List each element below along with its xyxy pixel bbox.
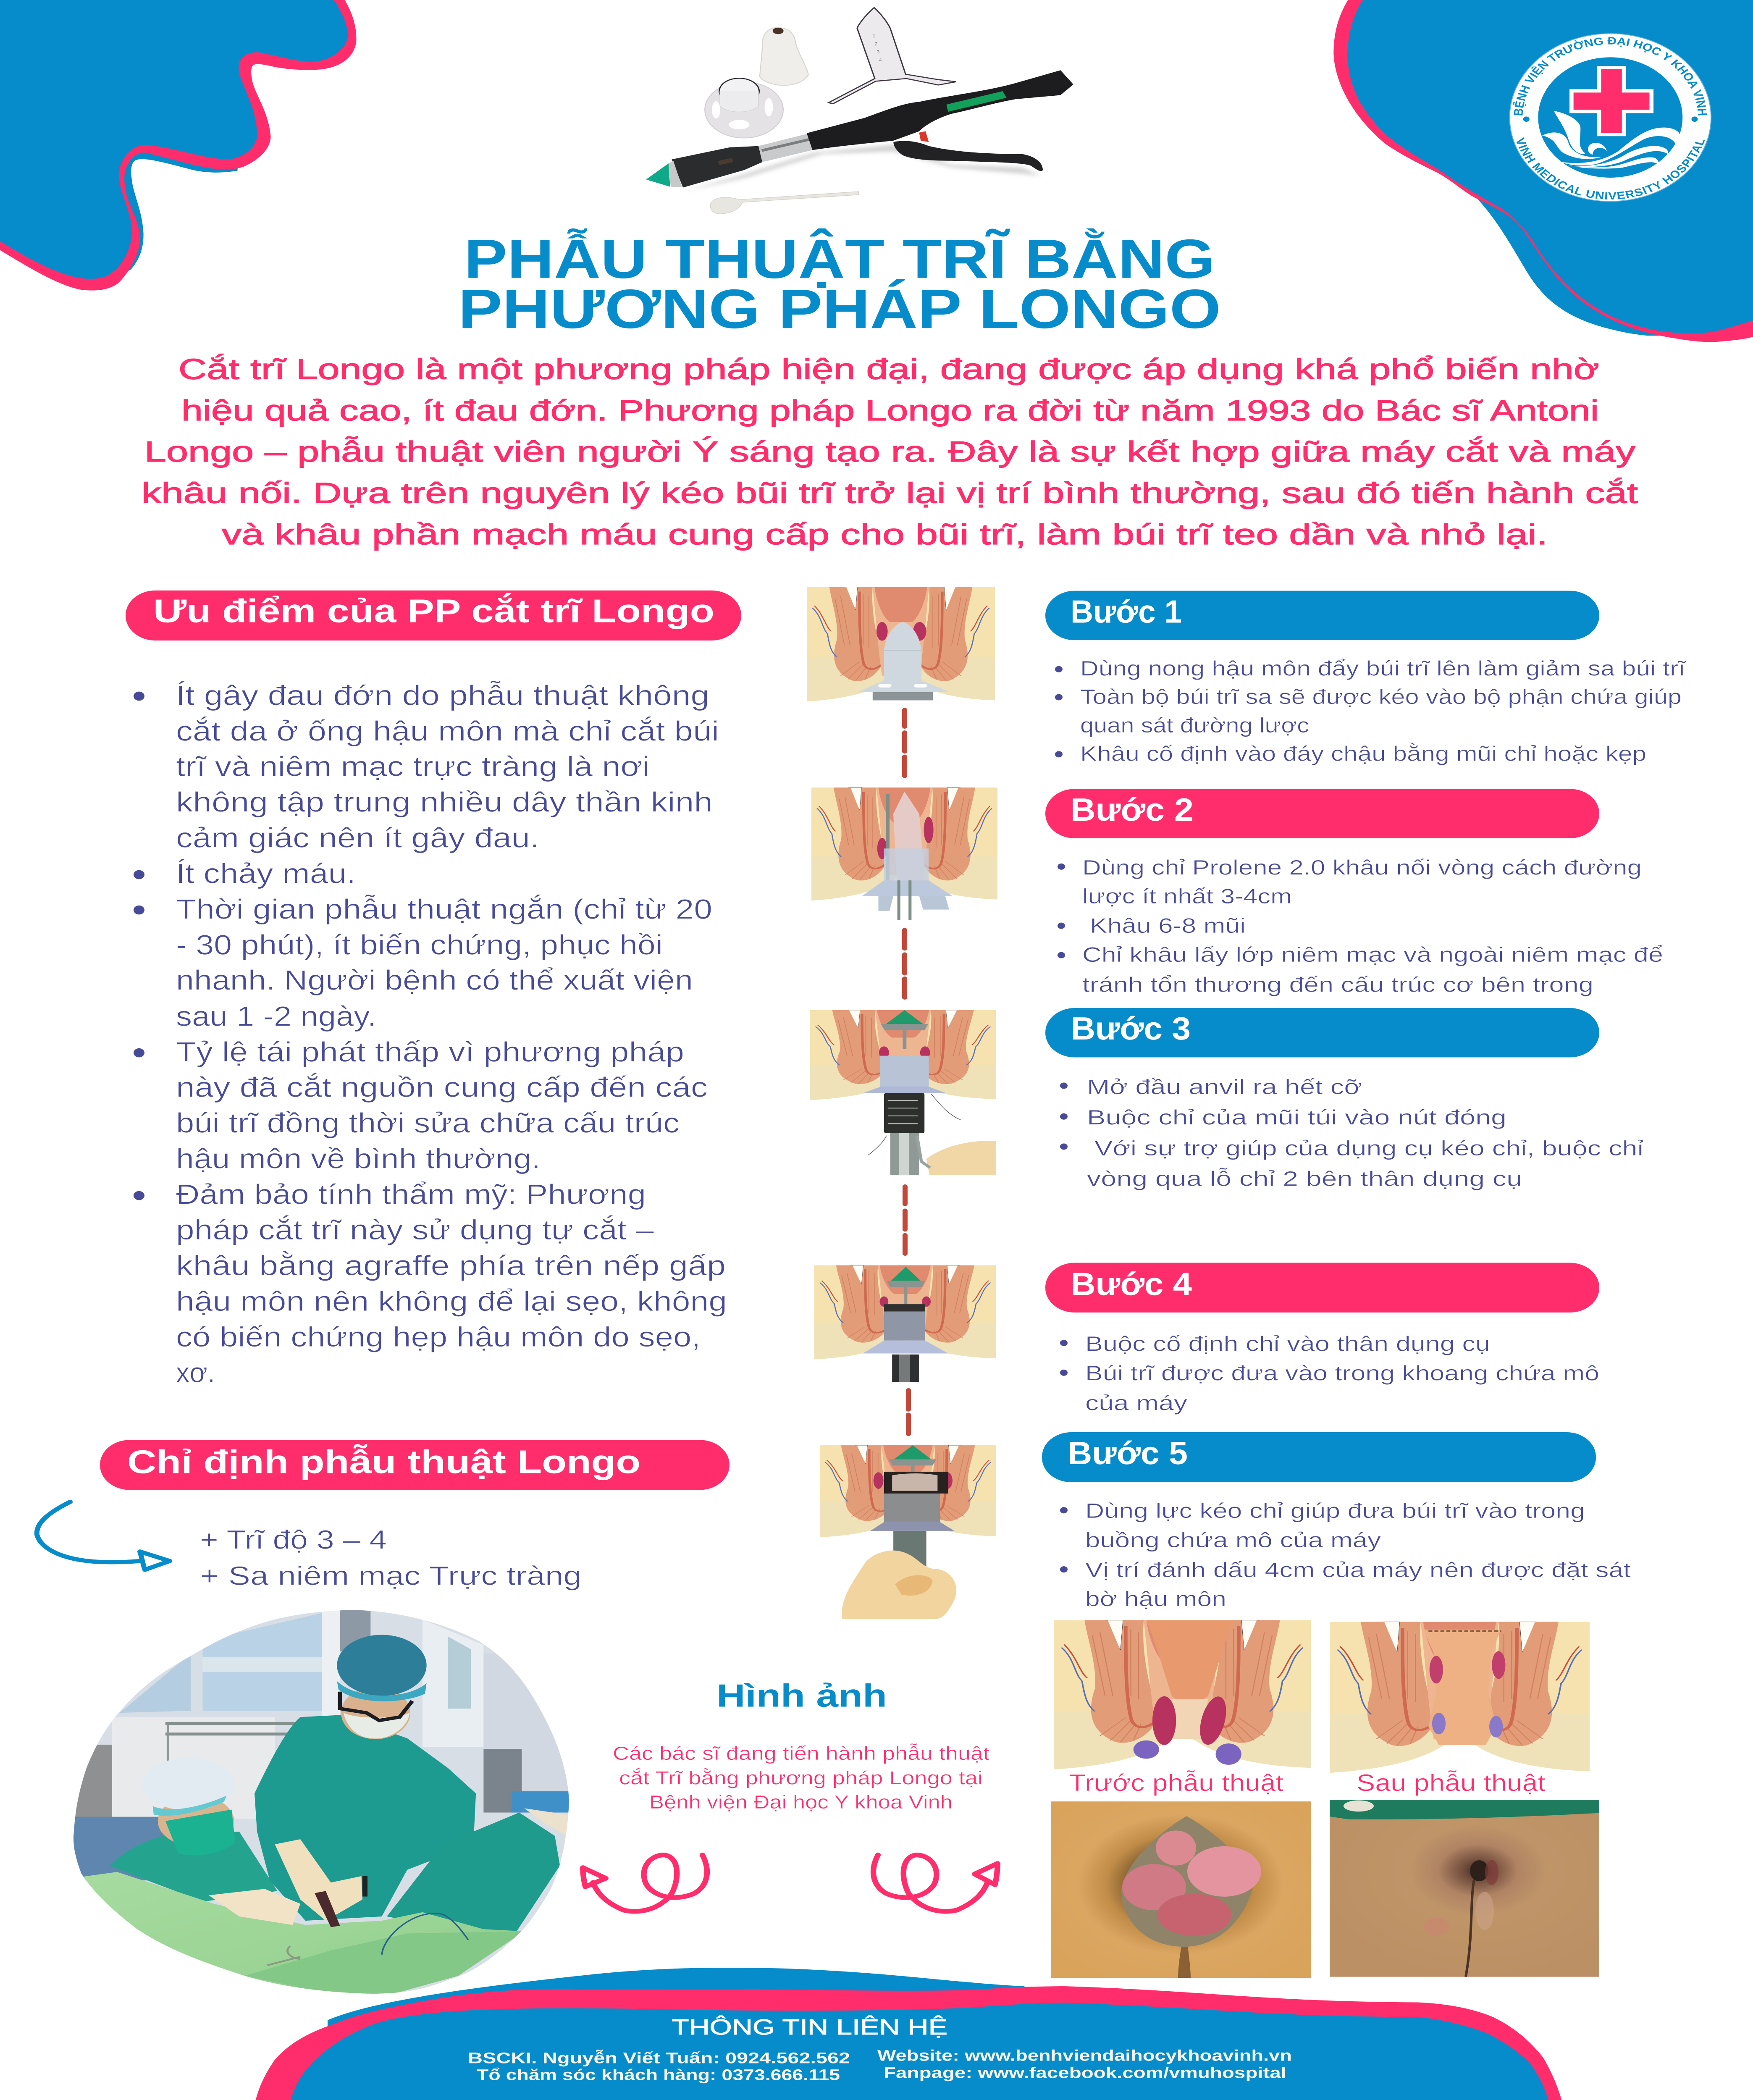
step 4 illustration [814, 1265, 996, 1382]
intro paragraph [142, 353, 1638, 551]
footer panel [256, 1968, 1561, 2100]
intro paragraph: Longo – phẫu thuật viên người Ý sáng tạo ra. Đây là sự kết hợp giữa máy cắt và máy [144, 436, 1636, 468]
footer contacts: Tổ chăm sóc khách hàng: 0373.666.115 [477, 2066, 840, 2084]
panel: advantages list: hậu môn nên không để lại sẹo, không [176, 1286, 727, 1317]
panel: step 1: Toàn bộ búi trĩ sa sẽ được kéo vào bộ phận chứa giúp [1080, 685, 1682, 709]
panel: step 3: Bước 3 [1071, 1011, 1191, 1047]
panel: step 5 [1042, 1432, 1631, 1611]
panel: advantages list: Tỷ lệ tái phát thấp vì phương pháp [176, 1037, 684, 1068]
panel: step 2: tránh tổn thương đến cấu trúc cơ bên trong [1082, 973, 1593, 996]
intro paragraph: hiệu quả cao, ít đau đớn. Phương pháp Longo ra đời từ năm 1993 do Bác sĩ Antoni [181, 394, 1599, 427]
icon: circular stapler [646, 70, 1073, 187]
panel: step 5: Vị trí đánh dấu 4cm của máy nên được đặt sát [1085, 1558, 1631, 1582]
footer contacts: Website: www.benhviendaihocykhoavinh.vn [877, 2047, 1292, 2064]
panel: step 3: Với sự trợ giúp của dụng cụ kéo chỉ, buộc chỉ [1094, 1137, 1643, 1160]
hospital logo [1510, 34, 1711, 202]
assistant surgeon [110, 1758, 278, 1902]
arrow: blue curved arrow [37, 1502, 170, 1570]
decorative corner blob: top left [0, 0, 356, 291]
icon: anoscope ruler [829, 8, 956, 104]
icon: anoscope ruler: 4 [879, 58, 882, 63]
panel: step 4: của máy [1085, 1391, 1187, 1415]
panel: step 2: lược ít nhất 3-4cm [1082, 885, 1292, 908]
text: indications list: + Sa niêm mạc Trực tràng [200, 1561, 582, 1591]
panel: advantages list: Ít chảy máu. [176, 858, 356, 889]
footer heading: THÔNG TIN LIÊN HỆ [672, 2015, 947, 2040]
decorative dashes [903, 1186, 908, 1254]
panel: step 4 [1045, 1263, 1599, 1415]
panel: advantages heading pill: Ưu điểm của PP cắt trĩ Longo [153, 593, 714, 629]
panel: advantages list: sau 1 -2 ngày. [176, 1000, 376, 1032]
step 1 illustration [807, 587, 995, 704]
panel: step 5: Dùng lực kéo chỉ giúp đưa búi trĩ vào trong [1085, 1499, 1585, 1522]
panel: advantages list: Ít gây đau đớn do phẫu thuật không [176, 680, 709, 711]
arrow: pink squiggle right [874, 1855, 997, 1911]
panel: step 1: Bước 1 [1071, 594, 1182, 630]
steps illustration column [807, 587, 997, 1619]
panel: advantages list: hậu môn về bình thường. [176, 1143, 541, 1174]
footer contacts: BSCKI. Nguyễn Viết Tuấn: 0924.562.562 [468, 2050, 850, 2067]
photo: surgeons operating [66, 1607, 575, 2001]
photo: after surgery [1330, 1800, 1599, 1977]
before-surgery diagram [1054, 1620, 1311, 1772]
decorative corner blob with logo: top right [1333, 0, 1753, 342]
panel: advantages list: Đảm bảo tính thẩm mỹ: Phương [176, 1179, 646, 1210]
panel: step 1: Khâu cố định vào đáy chậu bằng mũi chỉ hoặc kẹp [1080, 742, 1646, 765]
panel: advantages list: không tập trung nhiều dây thần kinh [176, 786, 713, 818]
panel: step 2: Khâu 6-8 mũi [1090, 914, 1246, 937]
step 3 illustration [810, 1010, 996, 1175]
panel: advantages list: Thời gian phẫu thuật ngắn (chỉ từ 20 [176, 894, 712, 925]
panel: indications heading pill: Chỉ định phẫu thuật Longo [127, 1444, 640, 1480]
title: PHƯƠNG PHÁP LONGO [458, 278, 1221, 340]
icon: clear anal dilator disc [705, 78, 783, 138]
panel: step 1: Dùng nong hậu môn đẩy búi trĩ lên làm giảm sa búi trĩ [1080, 656, 1686, 680]
panel: step 2: Bước 2 [1071, 792, 1194, 828]
panel: step 3: Mở đầu anvil ra hết cỡ [1087, 1075, 1362, 1099]
icon: anoscope ruler: 1 [873, 34, 875, 38]
patient drape [387, 1813, 560, 1935]
caption: before surgery: Trước phẫu thuật [1069, 1769, 1283, 1796]
panel: step 2: Chỉ khâu lấy lớp niêm mạc và ngoài niêm mạc để [1082, 943, 1663, 966]
gloved hands [209, 1839, 367, 1927]
hospital logo: VINH MEDICAL UNIVERSITY HOSPITAL [1513, 136, 1708, 202]
panel: step 1: quan sát đường lược [1080, 714, 1309, 737]
decorative dashes [906, 1390, 911, 1434]
text: indications list [200, 1525, 582, 1591]
heading: images: Hình ảnh [716, 1678, 887, 1714]
text: photo caption [613, 1743, 989, 1813]
stapler kit image [646, 8, 1073, 214]
text: photo caption: cắt Trĩ bằng phương pháp Longo tại [619, 1767, 983, 1788]
footer contacts [468, 2047, 1292, 2084]
icon: anoscope ruler: 2 [875, 42, 878, 47]
panel: step 5: bờ hậu môn [1085, 1587, 1226, 1611]
photo: before surgery [1051, 1801, 1311, 1978]
panel: step 2 [1045, 789, 1663, 996]
intro paragraph: khâu nối. Dựa trên nguyên lý kéo bũi trĩ trở lại vị trí bình thường, sau đó tiến hành cắt [142, 477, 1638, 509]
panel: advantages list: búi trĩ đồng thời sửa chữa cấu trúc [176, 1108, 680, 1139]
panel: step 4: Búi trĩ được đưa vào trong khoang chứa mô [1085, 1362, 1599, 1385]
icon: spoon tool [710, 192, 859, 214]
step 5 illustration [820, 1445, 996, 1619]
intro paragraph: Cắt trĩ Longo là một phương pháp hiện đại, đang được áp dụng khá phổ biến nhờ [178, 353, 1599, 386]
panel: step 3: vòng qua lỗ chỉ 2 bên thân dụng cụ [1087, 1167, 1522, 1190]
panel: advantages list: khâu bằng agraffe phía trên nếp gấp [176, 1250, 726, 1281]
panel: advantages list: - 30 phút), ít biến chứng, phục hồi [176, 929, 663, 961]
panel: step 2: Dùng chỉ Prolene 2.0 khâu nối vòng cách đường [1082, 856, 1642, 879]
text: indications list: + Trĩ độ 3 – 4 [200, 1525, 387, 1555]
panel: step 4: Bước 4 [1071, 1266, 1192, 1302]
panel: advantages list: nhanh. Người bệnh có thể xuất viện [176, 965, 693, 996]
panel: advantages list: xơ. [176, 1357, 215, 1388]
intro paragraph: và khâu phần mạch máu cung cấp cho bũi trĩ, làm búi trĩ teo dần và nhỏ lại. [222, 518, 1548, 551]
panel: advantages heading pill [126, 591, 741, 640]
text: photo caption: Các bác sĩ đang tiến hành phẫu thuật [613, 1743, 989, 1764]
after-surgery diagram [1330, 1622, 1590, 1776]
panel: advantages list: pháp cắt trĩ này sử dụng tự cắt – [176, 1214, 654, 1245]
panel: advantages list: có biến chứng hẹp hậu môn do sẹo, [176, 1321, 701, 1352]
step 2 illustration [811, 788, 997, 920]
panel: advantages list: trĩ và niêm mạc trực tràng là nơi [176, 751, 650, 782]
panel: step 3 [1045, 1008, 1643, 1190]
caption: after surgery: Sau phẫu thuật [1357, 1769, 1546, 1796]
panel: advantages list: này đã cắt nguồn cung cấp đến các [176, 1072, 708, 1103]
main surgeon [255, 1635, 476, 1921]
panel: advantages list: cảm giác nên ít gây đau. [176, 822, 539, 853]
panel: indications heading pill [100, 1440, 730, 1490]
icon: bell obturator [760, 28, 808, 85]
panel: step 5: Bước 5 [1068, 1436, 1188, 1471]
panel: step 4: Buộc cố định chỉ vào thân dụng cụ [1085, 1332, 1490, 1356]
hospital logo: BỆNH VIỆN TRƯỜNG ĐẠI HỌC Y KHOA VINH [1511, 35, 1709, 116]
icon: anoscope ruler: 3 [877, 50, 879, 55]
panel: advantages list [134, 680, 727, 1388]
panel: step 3: Buộc chỉ của mũi túi vào nút đóng [1087, 1105, 1506, 1129]
decorative dashes [902, 710, 907, 776]
title: PHẪU THUẬT TRĨ BẰNG [464, 228, 1215, 290]
panel: step 5: buồng chứa mô của máy [1085, 1528, 1381, 1552]
text: photo caption: Bệnh viện Đại học Y khoa Vinh [649, 1792, 953, 1813]
title [458, 228, 1221, 340]
arrow: pink squiggle left [583, 1855, 707, 1911]
footer contacts: Fanpage: www.facebook.com/vmuhospital [884, 2064, 1286, 2082]
decorative dashes [902, 930, 907, 998]
panel: advantages list: cắt da ở ống hậu môn mà chỉ cắt búi [176, 715, 719, 747]
panel: step 1 [1045, 591, 1686, 765]
